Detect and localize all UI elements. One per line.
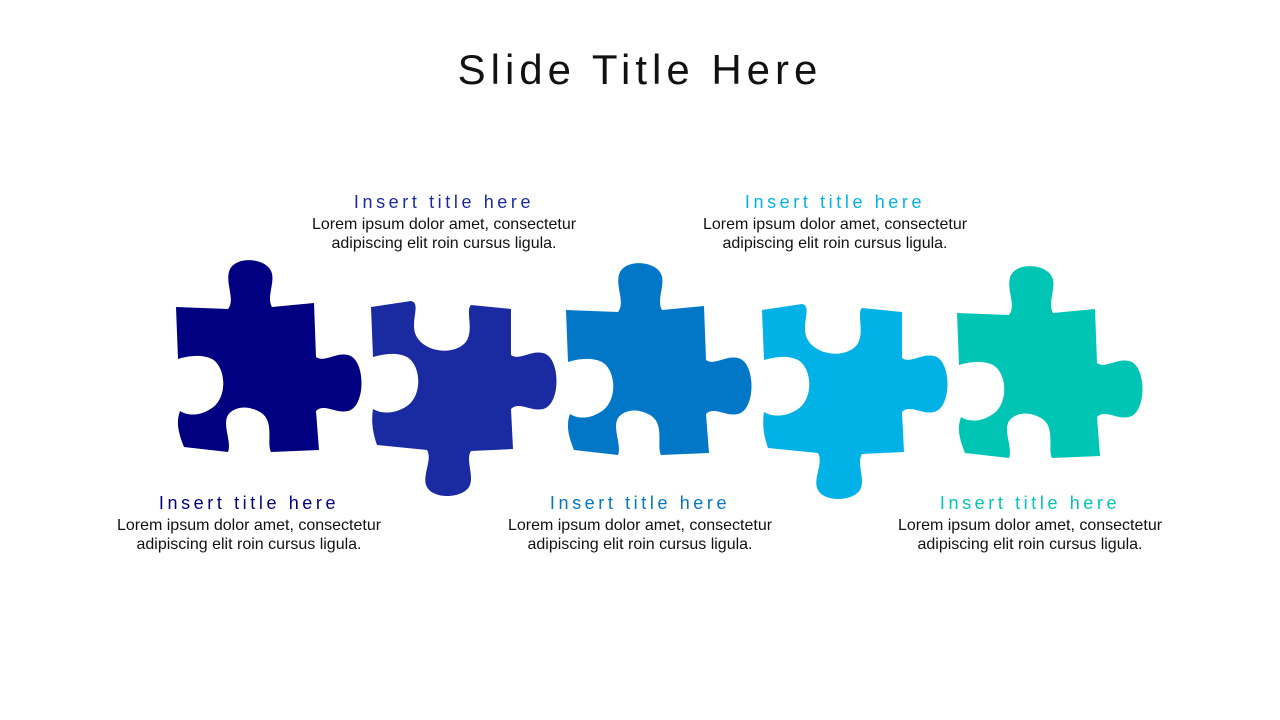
caption 3: adipiscing elit roin cursus ligula.	[528, 536, 752, 553]
caption 2: Lorem ipsum dolor amet, consectetur	[312, 216, 576, 233]
caption 1: Insert title here	[159, 493, 339, 513]
caption 4: Lorem ipsum dolor amet, consectetur	[703, 216, 967, 233]
caption 2	[312, 192, 576, 252]
piece 5	[957, 266, 1142, 458]
caption 1: adipiscing elit roin cursus ligula.	[136, 536, 362, 553]
caption 1: Lorem ipsum dolor amet, consectetur	[117, 517, 381, 534]
caption 4	[703, 192, 967, 252]
title: Slide Title Here	[458, 46, 822, 93]
piece 1	[176, 260, 362, 452]
piece 2	[371, 301, 556, 496]
caption 2: adipiscing elit roin cursus ligula.	[332, 235, 556, 252]
caption 4: adipiscing elit roin cursus ligula.	[722, 235, 948, 252]
caption 1	[117, 493, 381, 553]
piece 3	[566, 263, 752, 455]
caption 3: Lorem ipsum dolor amet, consectetur	[508, 517, 772, 534]
caption 3	[508, 493, 772, 553]
caption 5: Insert title here	[940, 493, 1120, 513]
caption 5: adipiscing elit roin cursus ligula.	[918, 536, 1142, 553]
caption 3: Insert title here	[550, 493, 730, 513]
caption 5	[898, 493, 1162, 553]
piece 4	[762, 304, 948, 499]
caption 5: Lorem ipsum dolor amet, consectetur	[898, 517, 1162, 534]
caption 4: Insert title here	[745, 192, 925, 212]
caption 2: Insert title here	[354, 192, 534, 212]
